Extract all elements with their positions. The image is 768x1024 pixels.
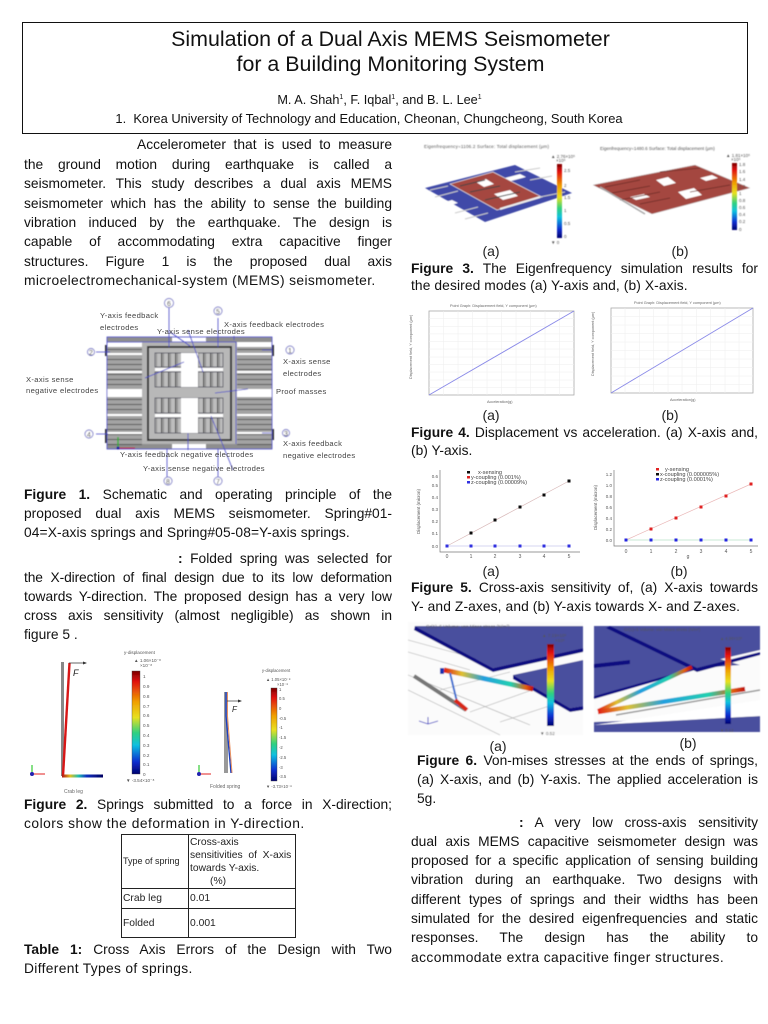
plot b: 4: [725, 549, 728, 555]
folded spring colour bar: -2: [279, 745, 283, 750]
plot a: 0.2: [432, 519, 438, 524]
panel a colour bar: 2: [564, 183, 567, 188]
label (a) fig 6: (a): [489, 738, 507, 754]
plot b: 1: [650, 549, 653, 555]
folded spring colour bar: [262, 668, 292, 789]
crab leg spring: [61, 662, 103, 778]
panel b colour bar: 1.6: [739, 169, 746, 174]
crab leg colour bar: 1: [143, 674, 146, 679]
electrode labels: negative electrodes: [26, 386, 99, 395]
panel a colour bar: 1.5: [564, 195, 571, 200]
plot b: Displacement field, Y component (µm): [591, 311, 595, 376]
panel b: ▼ 0.12: [720, 728, 734, 733]
table 1: 0.001: [190, 918, 216, 928]
folded spring: [224, 692, 242, 773]
panel b: Gr(1)=5 Volume: von Mises stress (N/m²): [624, 627, 701, 632]
table 1: (%): [210, 876, 226, 886]
electrode labels: [26, 311, 356, 473]
plot a: 0.6: [432, 474, 438, 479]
figure 4 caption: (b) Y-axis.: [411, 443, 472, 458]
panel a colour bar: [424, 144, 575, 245]
electrode labels: X-axis feedback electrodes: [224, 320, 324, 329]
conclusion text: responses. The design has the ability to: [411, 930, 758, 945]
plot a: 0.4: [432, 495, 438, 500]
figure 5: cross-axis sensitivity plots: [416, 467, 758, 560]
title: [171, 26, 610, 76]
introduction text: seismometer. This study describes a dual axis MEMS: [24, 176, 392, 191]
callout numbers: 8: [166, 479, 170, 486]
crab leg colour bar: 0.7: [143, 704, 150, 709]
table 1 caption: [24, 942, 392, 976]
electrode labels: X-axis sense: [26, 375, 74, 384]
label (b) fig 5: (b): [670, 563, 688, 579]
table 1: [121, 834, 296, 938]
table 1: 0.01: [190, 893, 210, 904]
folded spring colour bar: ▼ -3.73×10⁻⁸: [266, 784, 292, 789]
electrode labels: electrodes: [100, 323, 139, 332]
folded spring colour bar: -3.5: [279, 774, 287, 779]
plot b: 0.0: [606, 538, 612, 543]
table 1: Crab leg: [123, 893, 162, 904]
panel a model: [425, 165, 572, 222]
electrode labels: electrodes: [283, 369, 322, 378]
panel a: ×10⁶: [555, 638, 565, 643]
table 1: Type of spring: [123, 856, 180, 866]
crab leg colour bar: ▼ -3.54×10⁻⁸: [126, 778, 155, 783]
panel a colour bar: ▲ 2.76×10⁵: [551, 154, 575, 159]
conclusion text: simulated for the desired eigenfrequencies and static: [411, 911, 758, 926]
folded spring colour bar: -2.5: [279, 755, 287, 760]
label (b) fig 4: (b): [661, 407, 679, 423]
label (b) fig 3: (b): [671, 243, 689, 259]
callout numbers: 2: [89, 350, 93, 357]
plot b: 1.2: [606, 472, 612, 477]
label (a) fig 3: (a): [482, 243, 500, 259]
plot a: Point Graph: Displacement field, Y component (µm): [450, 304, 537, 308]
figure 2 caption: Figure 2. Springs submitted to a force in X-direction;: [24, 797, 392, 812]
plot b: Displacement (micron): [593, 484, 598, 530]
panel b colour bar: 1.2: [739, 184, 746, 189]
crab leg colour bar: 0.2: [143, 753, 150, 758]
crab leg colour bar: ×10⁻⁸: [140, 663, 152, 668]
figure 3 caption: Figure 3. The Eigenfrequency simulation results for: [411, 260, 758, 276]
spring discussion text: [24, 551, 392, 642]
plot a: 0.5: [432, 483, 438, 488]
callout numbers: 1: [288, 348, 292, 355]
folded spring colour bar: 1: [279, 687, 282, 692]
folded spring colour bar: ×10⁻⁸: [277, 682, 288, 687]
plot a: [409, 304, 574, 404]
panel a colour bar: ×10⁵: [556, 158, 566, 163]
numbered callouts: [85, 298, 294, 485]
figure 1 caption: 04=X-axis springs and Spring#05-08=Y-axis springs.: [24, 525, 350, 540]
electrode labels: Y-axis feedback negative electrodes: [120, 450, 254, 459]
plot a: Displacement (micron): [416, 488, 421, 534]
electrode labels: Y-axis feedback: [100, 311, 159, 320]
table 1: sensitivities of X-axis: [190, 850, 291, 860]
panel b colour bar: [600, 146, 750, 232]
crab leg spring: F: [73, 668, 79, 678]
crab leg colour bar: 0: [143, 772, 146, 777]
plot b: [593, 467, 758, 560]
figure 3 caption: [411, 260, 758, 293]
plot b: 2: [675, 549, 678, 555]
figure 1 caption: proposed dual axis MEMS seismometer. Spring#01-: [24, 506, 392, 521]
plot b: 0.2: [606, 527, 612, 532]
panel b colour bar: ▲ 1.81×10⁵: [726, 153, 750, 158]
panel b colour bar: 1.4: [739, 177, 746, 182]
conclusion text: : A very low cross-axis sensitivity: [519, 814, 758, 830]
folded spring colour bar: -0.5: [279, 716, 287, 721]
figure 4 caption: [411, 425, 758, 458]
conclusion text: [411, 814, 758, 965]
panel b colour bar: 0.8: [739, 198, 746, 203]
panel b colour bar: 0: [739, 227, 742, 232]
plot a: 4: [543, 554, 546, 560]
crab leg colour bar: 0.6: [143, 713, 150, 718]
introduction text: Accelerometer that is used to measure: [137, 137, 392, 152]
introduction text: vibration induced by the earthquake. The design is: [24, 215, 392, 230]
crab leg colour bar: y-displacement: [124, 650, 156, 655]
plot b: 3: [700, 549, 703, 555]
plot a: [416, 470, 580, 560]
panel a colour bar: Eigenfrequency=1106.2 Surface: Total displacement (µm): [424, 144, 549, 149]
electrode labels: X-axis feedback: [283, 439, 342, 448]
panel b colour bar: 0.6: [739, 205, 746, 210]
folded spring colour bar: y-displacement: [262, 668, 291, 673]
crab leg colour bar: 0.1: [143, 762, 150, 767]
plot b: 5: [750, 549, 753, 555]
conclusion text: accommodate extra capacitive finger structures.: [411, 950, 724, 965]
table 1 caption: Different Types of springs.: [24, 960, 193, 976]
spring discussion text: the X-direction of final design due to its low deformation: [24, 570, 392, 585]
plot b: g: [687, 554, 690, 560]
title: for a Building Monitoring System: [237, 52, 544, 76]
figure 5 caption: [411, 580, 758, 614]
spring discussion text: : Folded spring was selected for: [178, 551, 392, 566]
crab leg colour bar: [124, 650, 161, 783]
figure 2 caption: [24, 797, 392, 831]
panel b colour bar: ×10⁵: [731, 157, 741, 162]
table 1: Cross-axis: [190, 836, 239, 848]
electrode labels: Y-axis sense electrodes: [157, 327, 245, 336]
plot b: 1.0: [606, 483, 612, 488]
label (a) fig 4: (a): [482, 407, 500, 423]
folded spring label and axes: Folded spring: [210, 784, 241, 790]
crab leg colour bar: 0.5: [143, 723, 150, 728]
plot a: 0.3: [432, 507, 438, 512]
plot a: 1: [470, 554, 473, 560]
panel b colour bar: 1: [739, 191, 742, 196]
leader lines: [96, 307, 272, 480]
crab leg label and axes: [30, 765, 83, 795]
panel b colour bar: Eigenfrequency=1480.6 Surface: Total displacement (µm): [600, 146, 715, 151]
plot a: z-coupling (0.00009%): [471, 480, 527, 486]
table 1 caption: Table 1: Cross Axis Errors of the Design with Two: [24, 942, 392, 957]
header box: [22, 22, 748, 134]
table 1: Folded: [123, 918, 154, 928]
plot b: [591, 301, 753, 402]
affiliation: 1. Korea University of Technology and Education, Cheonan, Chungcheong, South Korea: [115, 111, 623, 126]
figure 5 caption: Y- and Z-axes, and (b) Y-axis towards X- and Z-axes.: [411, 599, 740, 614]
conclusion text: proposed for a specific application of sensing building: [411, 853, 758, 868]
plot a: Displacement field, Y component (µm): [409, 314, 413, 379]
plot b: z-coupling (0.0001%): [660, 477, 713, 483]
panel a colour bar: 0.5: [564, 221, 571, 226]
plot a: 3: [519, 554, 522, 560]
authors: M. A. Shah1, F. Iqbal1, and B. L. Lee1: [277, 93, 482, 107]
panel a colour bar: 0: [564, 234, 567, 239]
figure 4: displacement vs acceleration plots: [409, 301, 754, 404]
folded spring label and axes: [197, 765, 241, 790]
callout numbers: [87, 301, 292, 486]
panel a: Gr(1)=5 Volume: von Mises stress (N/m²): [426, 624, 510, 629]
panel a: ▲ 7.19×10⁶: [542, 633, 567, 638]
electrode labels: Proof masses: [276, 387, 327, 396]
spring discussion text: cross axis sensitivity (almost negligible) as shown in: [24, 608, 392, 623]
figure 6 caption: 5g.: [417, 791, 436, 806]
callout numbers: 4: [87, 432, 91, 439]
plot a: 0.0: [432, 544, 438, 549]
figure 6 caption: (a) X-axis, and (b) Y-axis. The applied acceleration is: [417, 772, 758, 787]
introduction text: microelectromechanical-system (MEMS) seismometer.: [24, 273, 376, 288]
crab leg colour bar: 0.8: [143, 694, 150, 699]
callout numbers: 6: [167, 301, 171, 308]
folded spring: F: [232, 705, 238, 714]
title: Simulation of a Dual Axis MEMS Seismometer: [171, 26, 610, 50]
crab leg colour bar: 0.9: [143, 684, 150, 689]
device body: [105, 337, 274, 449]
folded spring colour bar: 0: [279, 706, 282, 711]
figure 6: von Mises stress renders: [408, 624, 761, 736]
callout numbers: 3: [284, 431, 288, 438]
plot b: Point Graph: Displacement field, Y component (µm): [634, 301, 721, 305]
figure 2 caption: colors show the deformation in Y-direction.: [24, 816, 305, 831]
callout numbers: 7: [216, 479, 220, 486]
plot b: 0: [625, 549, 628, 555]
introduction text: seismometer which has the ability to sense the building: [24, 196, 392, 211]
figure 3: eigenfrequency simulation: [424, 144, 750, 245]
plot b: x-coupling (0.000005%): [660, 472, 719, 478]
plot b: 0.4: [606, 516, 612, 521]
figure 5 caption: Figure 5. Cross-axis sensitivity of, (a) X-axis towards: [411, 580, 758, 595]
plot b: Acceleration(g): [670, 398, 696, 402]
panel b colour bar: 1.8: [739, 162, 746, 167]
spring discussion text: towards Y-direction. The proposed design has a very low: [24, 589, 392, 604]
panel b: [594, 626, 760, 733]
conclusion text: vibration during an earthquake. Two designs with: [411, 872, 758, 887]
folded spring colour bar: -1.5: [279, 735, 287, 740]
crab leg label and axes: Crab leg: [64, 789, 83, 795]
crab leg colour bar: ▲ 1.06×10⁻⁸: [134, 658, 161, 663]
table 1: towards Y-axis.: [190, 862, 259, 874]
figure 3 caption: the desired modes (a) Y-axis and, (b) X-axis.: [411, 278, 688, 292]
figure 2: spring deformation: [30, 650, 292, 795]
introduction text: the ground motion during earthquake is called a: [24, 157, 392, 172]
figure 1: seismometer schematic: [26, 182, 730, 758]
figure 1 caption: Figure 1. Schematic and operating principle of the: [24, 487, 392, 502]
panel b model: [593, 165, 750, 214]
plot b: 0.6: [606, 505, 612, 510]
figure 6 caption: [417, 753, 758, 806]
plot b: y-sensing: [665, 467, 689, 473]
callout numbers: 5: [216, 309, 220, 316]
electrode labels: X-axis sense: [283, 357, 331, 366]
folded spring colour bar: -1: [279, 725, 283, 730]
conclusion text: dual axis MEMS capacitive seismometer design was: [411, 834, 758, 849]
electrode labels: Y-axis sense negative electrodes: [143, 464, 265, 473]
introduction text: structures. Figure 1 is the proposed dual axis: [24, 254, 392, 269]
plot a: 0.1: [432, 531, 438, 536]
plot a: 2: [494, 554, 497, 560]
plot a: Acceleration(g): [487, 400, 513, 404]
plot a: 0: [446, 554, 449, 560]
label (b) fig 6: (b): [679, 735, 697, 751]
panel a colour bar: ▼ 0: [551, 240, 560, 245]
panel a: ▼ 0.52: [540, 731, 555, 736]
crab leg colour bar: 0.4: [143, 733, 150, 738]
introduction text: [24, 137, 392, 288]
plot b: 0.8: [606, 494, 612, 499]
panel b: ▲ 4.90×10⁶: [720, 636, 743, 641]
conclusion text: different types of springs and their widths has been: [411, 892, 758, 907]
panel b colour bar: 0.4: [739, 212, 746, 217]
folded spring colour bar: -3: [279, 765, 283, 770]
crab leg colour bar: 0.3: [143, 743, 150, 748]
panel a: [408, 622, 583, 736]
electrode labels: negative electrodes: [283, 451, 356, 460]
plot a: x-sensing: [478, 470, 502, 476]
figure 4 caption: Figure 4. Displacement vs acceleration. (a) X-axis and,: [411, 425, 758, 440]
introduction text: capable of accommodating extra capacitive finger: [24, 234, 392, 249]
plot a: y-coupling (0.001%): [471, 475, 521, 481]
label (a) fig 5: (a): [482, 563, 500, 579]
axis triad: [116, 437, 135, 450]
folded spring colour bar: ▲ 1.05×10⁻⁸: [266, 677, 291, 682]
panel a colour bar: 1: [564, 208, 567, 213]
figure 6 caption: Figure 6. Von-mises stresses at the ends of springs,: [417, 753, 758, 768]
folded spring colour bar: 0.5: [279, 696, 285, 701]
figure 1 caption: [24, 487, 392, 540]
spring discussion text: figure 5 .: [24, 627, 78, 642]
panel a colour bar: 2.5: [564, 168, 571, 173]
plot a: 5: [568, 554, 571, 560]
panel b colour bar: 0.2: [739, 219, 746, 224]
